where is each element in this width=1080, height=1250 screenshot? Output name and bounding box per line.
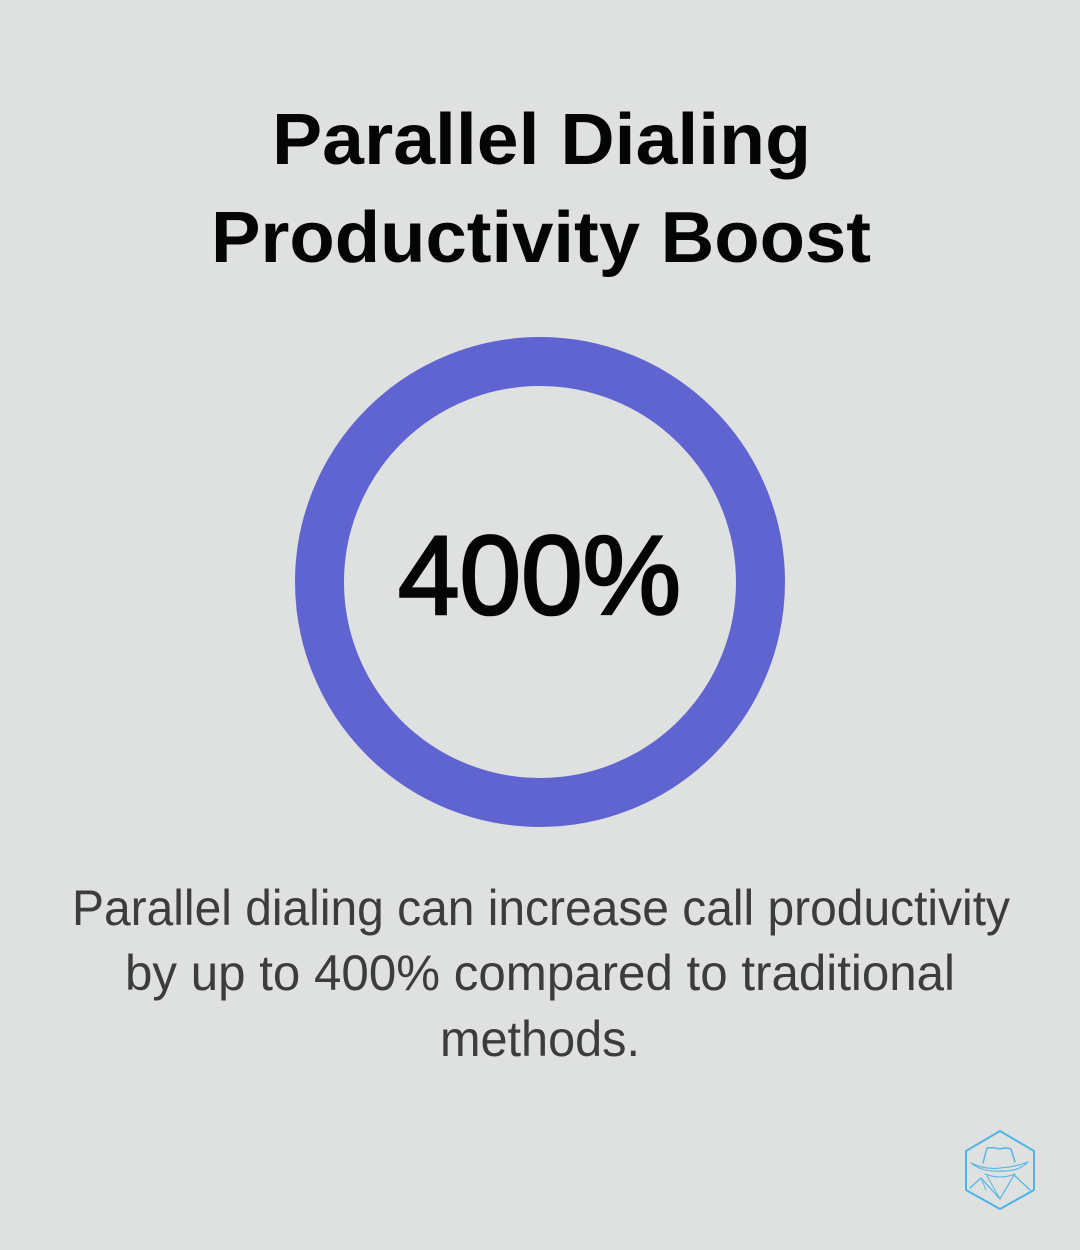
description text: by up to 400% compared to traditional [125, 945, 955, 1001]
ring chart [320, 362, 760, 802]
description text [72, 880, 1010, 1067]
title [211, 100, 871, 278]
title: Parallel Dialing [272, 100, 811, 180]
big percentage: 400% [398, 513, 681, 638]
description text: methods. [440, 1011, 640, 1067]
icon: logo hexagon with hat [966, 1131, 1034, 1209]
title: Productivity Boost [211, 198, 871, 278]
description text: Parallel dialing can increase call productivity [72, 880, 1010, 936]
